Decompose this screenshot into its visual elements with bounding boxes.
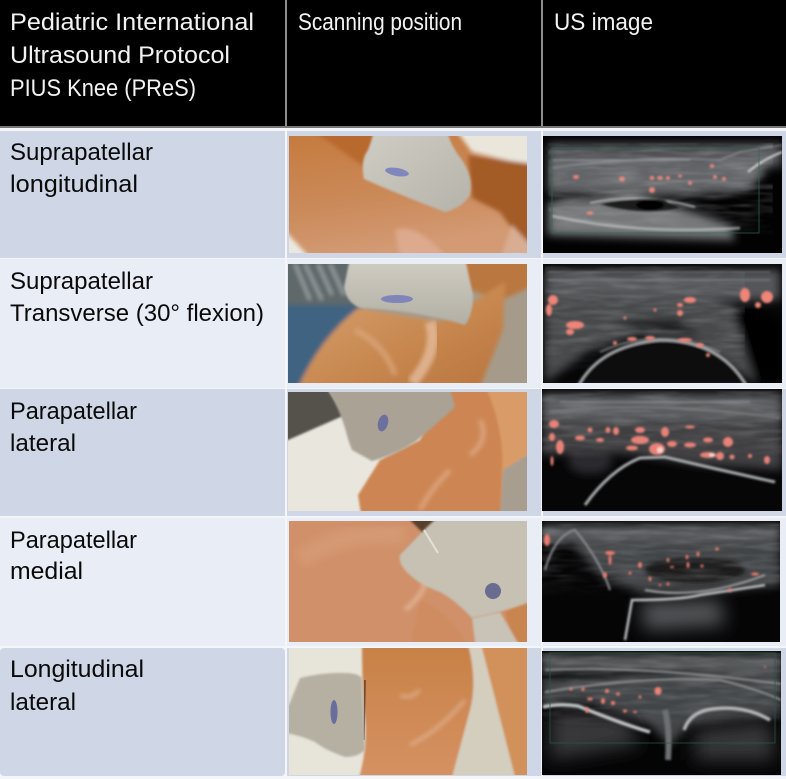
row 3 probe [325,385,455,461]
row 3 label: lateral [10,430,76,457]
row 1: suprapatellar longitudinal [0,125,786,260]
header: protocol title: PIUS Knee (PReS) [10,75,196,102]
row 3 label: Parapatellar [10,398,137,425]
row 5 label: Longitudinal [10,656,144,683]
row 3 ultrasound image [542,389,782,511]
row 2 ultrasound image [543,264,782,386]
row 2 probe [344,258,473,325]
header: protocol title [10,9,254,102]
row 1 label: Suprapatellar [10,139,153,166]
row 5 doppler signal [570,666,766,713]
row 3: parapatellar lateral [0,385,786,520]
row 1 scanning photo [289,136,527,253]
row 4 ultrasound image [542,521,780,642]
row 1 ultrasound image [543,136,782,253]
row 2: suprapatellar transverse [0,255,786,392]
row 4 doppler signal [544,534,759,592]
row 5 label [10,656,144,716]
header: US image: US image [554,9,653,36]
row 2 label: Transverse (30° flexion) [10,300,264,327]
row 4 label: medial [10,558,83,585]
row 1 label: longitudinal [10,171,138,198]
row 3 label [10,398,137,457]
row 4 scanning photo [289,521,527,642]
row 1 doppler signal [573,164,726,215]
header row [0,0,786,128]
row 4 probe [398,521,527,618]
row 5 probe [280,673,365,757]
header: scanning position: Scanning position [298,9,462,36]
row 1 probe [363,130,471,212]
row 2 scanning photo [288,264,527,383]
row 3 scanning photo [288,392,527,511]
row 5 scanning photo [289,648,527,775]
row 4 label: Parapatellar [10,527,137,554]
header: protocol title: Pediatric International [10,9,254,36]
header: protocol title: Ultrasound Protocol [10,42,230,69]
row 4 label [10,527,137,585]
row 5: longitudinal lateral [0,640,786,779]
row 2 label: Suprapatellar [10,268,153,295]
row 2 doppler signal [546,288,773,357]
row 2 label [10,268,264,327]
row 5 ultrasound image [542,651,781,775]
row 3 doppler signal [549,420,770,466]
row 4: parapatellar medial [0,515,786,650]
row 5 label: lateral [10,689,76,716]
row 1 label [10,139,153,198]
